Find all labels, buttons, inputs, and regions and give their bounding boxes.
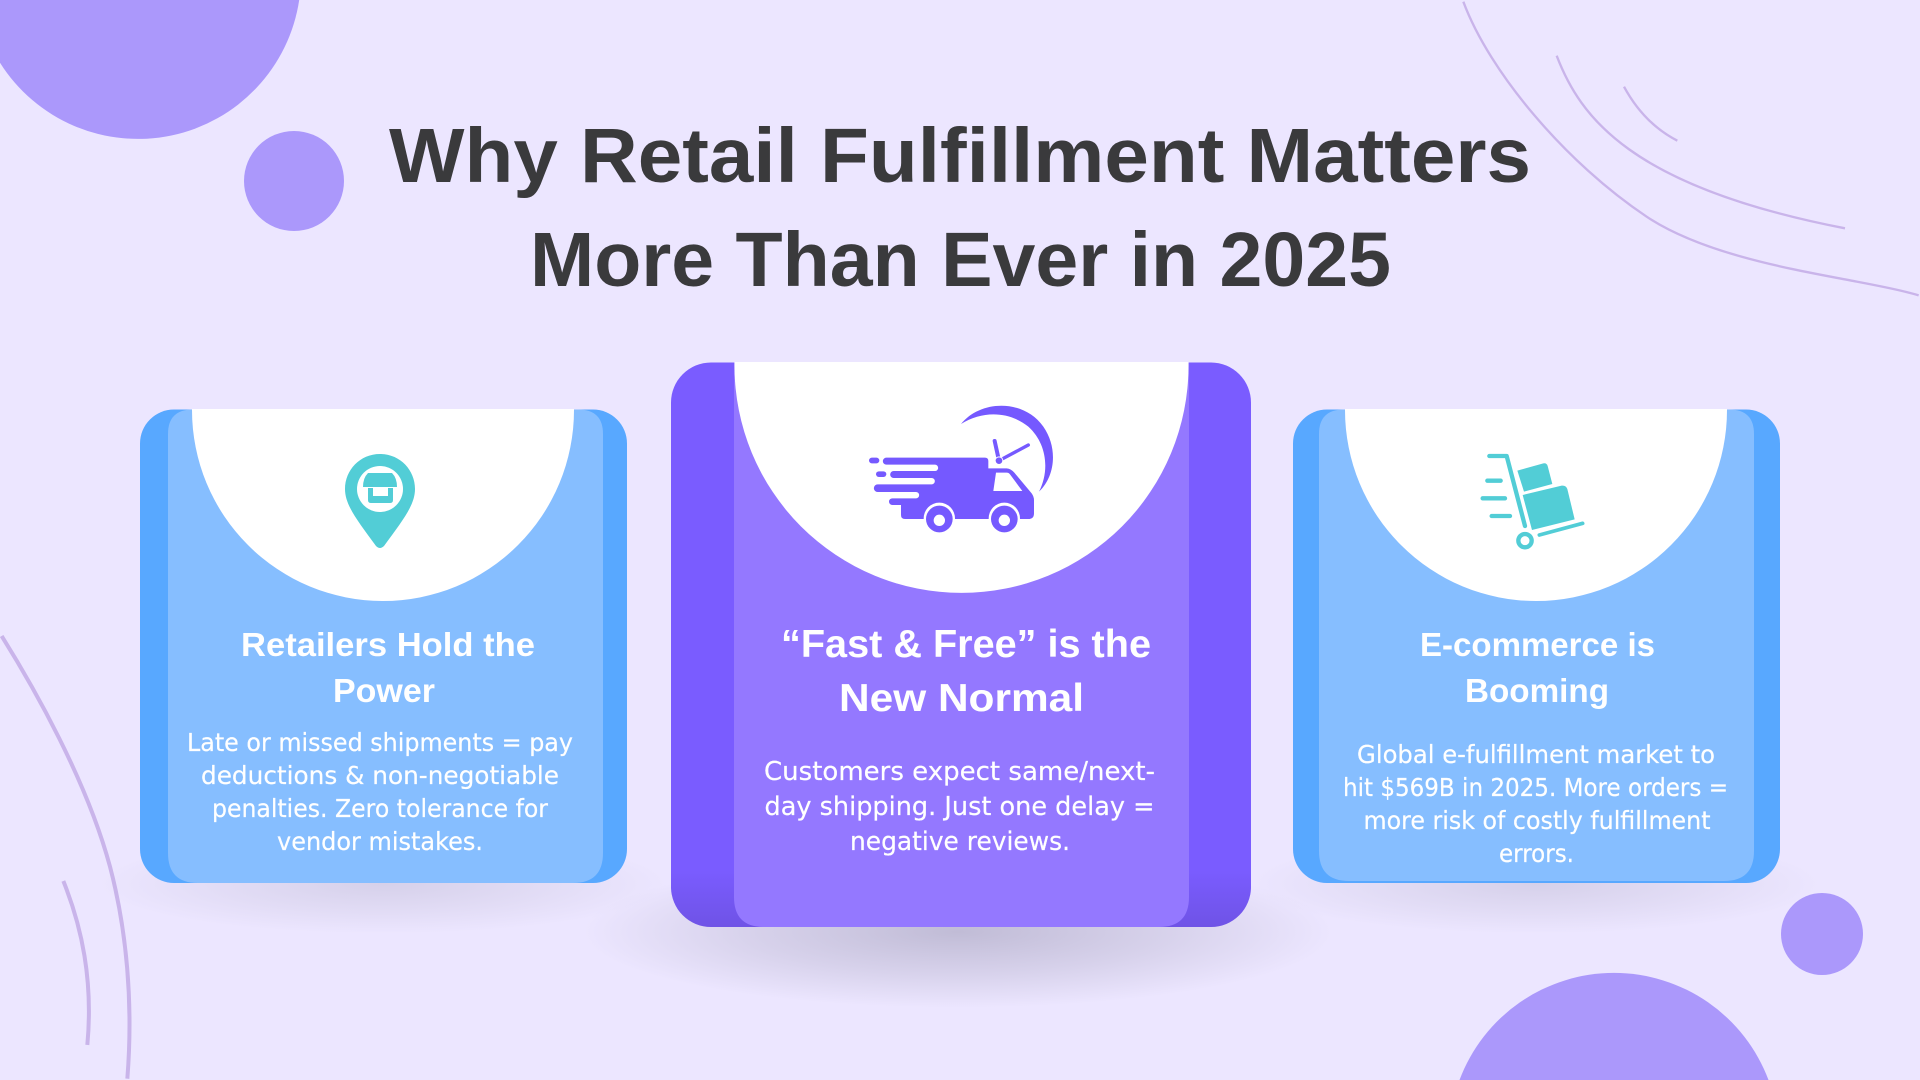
body text [187, 728, 573, 856]
body text: vendor mistakes. [277, 827, 483, 856]
body text: penalties. Zero tolerance for [212, 794, 549, 823]
body text: Global e-fulfillment market to [1357, 740, 1715, 769]
heading [1420, 626, 1655, 709]
heading: Power [333, 672, 435, 709]
decorative circle: top left small [244, 131, 344, 231]
title: Why Retail Fulfillment Matters [389, 113, 1531, 199]
body text [764, 757, 1155, 857]
panel: Fast and Free is the New Normal [671, 362, 1251, 927]
icon: store location pin [345, 454, 415, 548]
title: More Than Ever in 2025 [530, 217, 1391, 303]
heading: New Normal [839, 677, 1084, 720]
body text [1343, 740, 1728, 868]
heading: Booming [1465, 672, 1609, 709]
body text: hit $569B in 2025. More orders = [1343, 773, 1728, 802]
decorative circle: bottom right large [1460, 973, 1768, 1080]
panel: Retailers Hold the Power [140, 409, 627, 883]
decorative circle: bottom right small [1781, 893, 1863, 975]
body text: Customers expect same/next- [764, 757, 1155, 787]
body text: day shipping. Just one delay = [764, 792, 1154, 822]
heading: Retailers Hold the [241, 626, 535, 663]
body text: negative reviews. [850, 827, 1070, 857]
heading [781, 623, 1151, 720]
body text: deductions & non-negotiable [201, 761, 559, 790]
shadow: right card [1251, 834, 1821, 934]
body text: Late or missed shipments = pay [187, 728, 573, 757]
body text: more risk of costly fulfillment [1364, 806, 1711, 835]
heading [241, 626, 535, 709]
icon: hand truck with boxes [1483, 456, 1583, 547]
decorative circle: top left large [0, 0, 299, 139]
heading: E-commerce is [1420, 626, 1655, 663]
body text: errors. [1499, 839, 1574, 868]
panel: E-commerce is Booming [1293, 409, 1780, 883]
shadow: left card [98, 834, 668, 934]
shadow: center card [583, 856, 1333, 1008]
title [389, 113, 1531, 303]
icon: delivery van with clock [869, 406, 1053, 534]
heading: “Fast & Free” is the [781, 623, 1151, 666]
